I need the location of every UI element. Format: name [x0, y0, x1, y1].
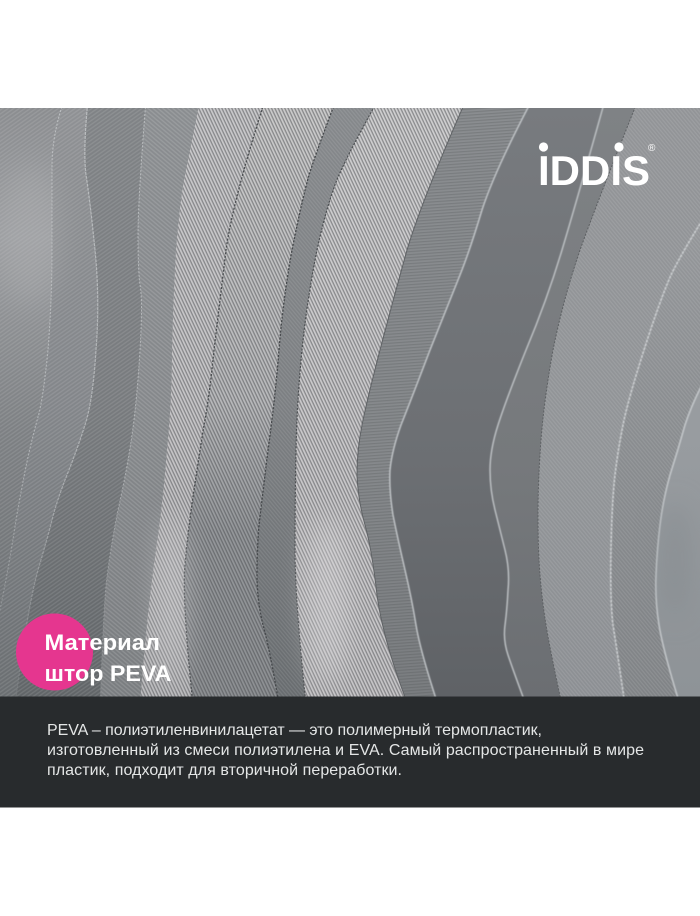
- description text: пластик, подходит для вторичной переработки.: [47, 762, 402, 779]
- infographic canvas: [0, 108, 700, 808]
- description text: PEVA – полиэтиленвинилацетат — это полимерный термопластик,: [47, 722, 542, 739]
- description text: [47, 722, 644, 779]
- photo: wavy striped PEVA curtain fabric: [0, 108, 700, 696]
- heading: material: [44, 630, 172, 686]
- panel: PEVA description: [0, 696, 700, 808]
- pink accent circle: [16, 614, 93, 690]
- logo: IDDIS: ®: [648, 143, 656, 154]
- heading: material: штор PEVA: [44, 661, 172, 686]
- logo: IDDIS: IDDIS: [538, 147, 650, 194]
- description text: изготовленный из смеси полиэтилена и EVA. Самый распространенный в мире: [47, 742, 644, 759]
- heading: material: Материал: [44, 630, 160, 655]
